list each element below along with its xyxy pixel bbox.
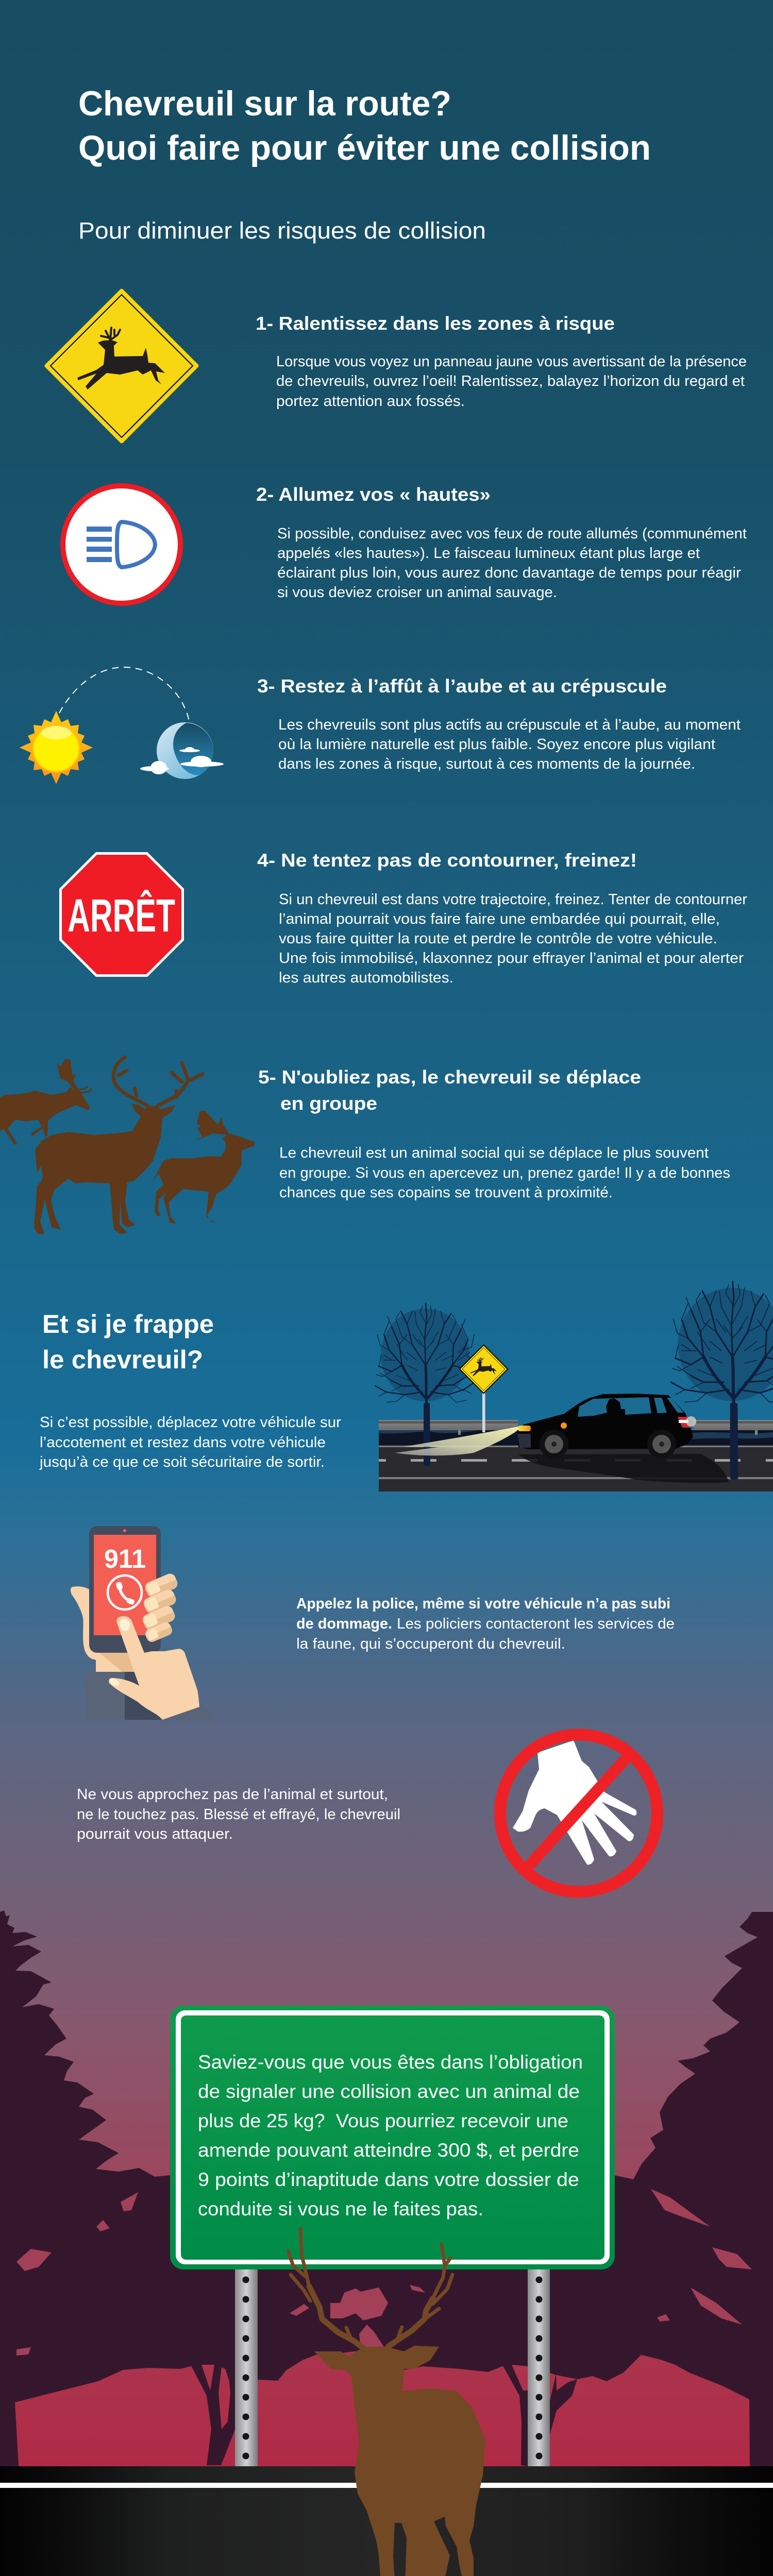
tip 1 text [276,353,747,410]
title [78,84,651,167]
call icon [108,1575,142,1609]
green highway sign [170,2006,615,2269]
icon: high beam sign [63,486,180,603]
sign text: amende pouvant atteindre 300 $, et perdre [198,2139,579,2161]
tip 3 text: dans les zones à risque, surtout à ces moments de la journée. [278,756,695,772]
title: Quoi faire pour éviter une collision [78,128,651,167]
roadside hills [379,1430,773,1439]
hand holding phone [71,1586,135,1672]
road [0,2466,773,2576]
phone screen [94,1535,156,1635]
heading: et si je frappe: Et si je frappe [42,1310,214,1338]
tip 5 text: Le chevreuil est un animal social qui se déplace le plus souvent [279,1145,709,1161]
left small trunk [191,2365,235,2465]
call police text: de dommage. [296,1616,392,1632]
icon: herd of deer silhouettes [0,1057,255,1234]
tip 4 text [279,891,747,986]
call police text [296,1596,675,1652]
sign text: conduite si vous ne le faites pas. [198,2198,483,2219]
call police text: Appelez la police, même si votre véhicule n’a pas subi [296,1596,670,1612]
guard rail [379,1420,773,1435]
car shadow [518,1454,729,1483]
tip 4 text: l’animal pourrait vous faire faire une embardée qui pourrait, elle, [279,911,720,927]
road sign [460,1345,508,1393]
cuff [86,1672,125,1720]
tip 1 text: de chevreuils, ouvrez l’oeil! Ralentissez, balayez l’horizon du regard et [276,373,745,389]
tip 4 text: les autres automobilistes. [279,970,453,986]
do not touch text: pourrait vous attaquer. [77,1826,233,1842]
deer seen from behind [288,2229,485,2576]
phone body [89,1526,161,1653]
do not touch text [77,1786,400,1842]
icon: sun [20,711,93,784]
tree left [375,1303,477,1466]
tip 3 heading: 3- Restez à l’affût à l’aube et au crépuscule [257,675,667,697]
tip 2 text: Si possible, conduisez avec vos feux de route allumés (communément [277,526,747,542]
asphalt [379,1445,773,1492]
icon: stop sign [59,852,184,977]
tip 1 text: portez attention aux fossés. [276,393,465,410]
sign posts [235,2267,550,2466]
tip 4 text: vous faire quitter la route et perdre le contrôle de votre véhicule. [279,930,717,947]
call police text: Les policiers contacteront les services de [397,1616,675,1632]
tree right [671,1282,773,1480]
sign text: 9 points d’inaptitude dans votre dossier de [198,2168,579,2190]
tip 5 text: chances que ses copains se trouvent à proximité. [279,1184,613,1201]
icon: moon with clouds [140,722,224,779]
fingers [141,1572,179,1643]
911 number: 911 [104,1544,146,1573]
sky patches through the trees [16,2189,752,2355]
tip 2 heading: 2- Allumez vos « hautes» [256,484,491,505]
collision advice text: l’accotement et restez dans votre véhicule [40,1434,326,1451]
tip 4 text: Si un chevreuil est dans votre trajectoire, freinez. Tenter de contourner [279,891,747,908]
subtitle: Pour diminuer les risques de collision [78,217,486,244]
sign text [198,2051,583,2219]
tip 5 text [279,1145,730,1201]
illustration: hand dialling 911 [71,1526,213,1720]
sign text: plus de 25 kg? Vous pourriez recevoir une [198,2110,568,2131]
tip 4 heading: 4- Ne tentez pas de contourner, freinez! [257,850,637,871]
tip 5 heading: 5- N'oubliez pas, le chevreuil se déplace [258,1066,641,1088]
car [517,1394,696,1459]
heading: et si je frappe: le chevreuil? [42,1345,203,1374]
collision advice text: Si c’est possible, déplacez votre véhicule sur [40,1414,341,1431]
right small trunk [502,2364,577,2466]
tip 4 text: Une fois immobilisé, klaxonnez pour effrayer l’animal et pour alerter [279,950,744,967]
tip 5 text: en groupe. Si vous en apercevez un, prenez garde! Il y a de bonnes [279,1165,730,1181]
collision advice text: jusqu’à ce que ce soit sécuritaire de sortir. [39,1454,325,1470]
do not touch text: Ne vous approchez pas de l’animal et surtout, [77,1786,388,1803]
title: Chevreuil sur la route? [78,84,451,123]
tip 1 heading: 1- Ralentissez dans les zones à risque [256,313,615,334]
icon: no touching hand [500,1735,658,1892]
headlight beam [395,1426,522,1455]
tip 3 text: Les chevreuils sont plus actifs au crépuscule et à l’aube, au moment [278,717,741,733]
illustration: car at night on road [375,1282,773,1492]
collision advice text [39,1414,341,1470]
sleeve pointing hand [162,1705,213,1720]
sign text: de signaler une collision avec un animal de [198,2080,580,2102]
icon: deer crossing sign [46,291,197,442]
tip 5 heading: en groupe [280,1093,377,1114]
tip 2 text [277,526,747,601]
dark roadside band [379,1430,773,1446]
call police text: la faune, qui s’occuperont du chevreuil. [296,1636,565,1652]
icon: stop sign: ARRÊT [68,889,175,942]
road sign post [482,1391,485,1432]
tip 3 text [278,717,741,772]
tip 2 text: si vous deviez croiser un animal sauvage. [277,584,557,601]
tip 2 text: appelés «les hautes»). Le faisceau lumineux étant plus large et [277,545,700,562]
tip 1 text: Lorsque vous voyez un panneau jaune vous avertissant de la présence [276,353,747,370]
heading: et si je frappe [42,1310,214,1374]
tip 3 text: où la lumière naturelle est plus faible. Soyez encore plus vigilant [278,736,715,753]
pointing hand [109,1616,199,1720]
sign text: Saviez-vous que vous êtes dans l’obligation [198,2051,583,2073]
do not touch text: ne le touchez pas. Blessé et effrayé, le chevreuil [77,1806,400,1823]
tip 5 heading [258,1066,641,1114]
dashed arc from sun to moon [59,667,190,723]
tip 2 text: éclairant plus loin, vous aurez donc davantage de temps pour réagir [277,565,741,581]
forest silhouette [0,1910,773,2466]
